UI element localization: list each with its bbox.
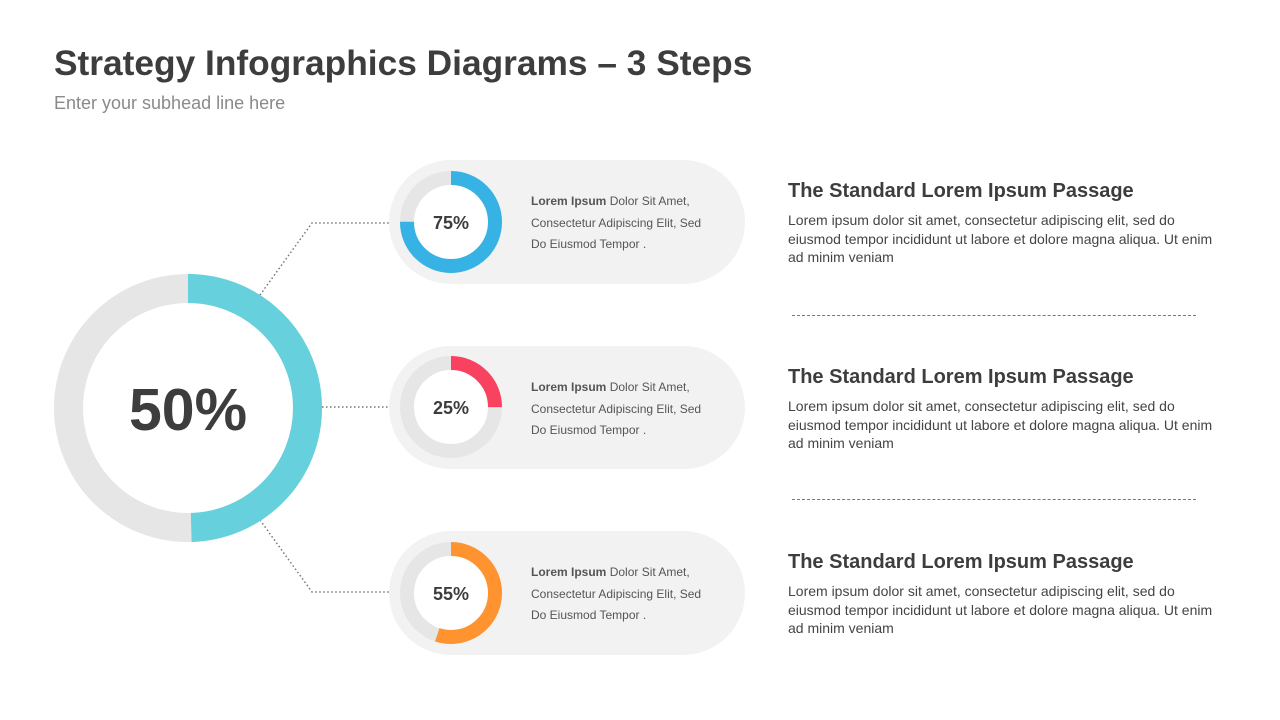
text block 2: Lorem ipsum dolor sit amet, consectetur adipiscing elit, sed do eiusmod tempor incididunt ut labore et dolore magna aliqua. Ut enim ad minim veniam [788,398,1212,451]
connectors [260,223,389,592]
text block 2 [788,366,1212,451]
pill text 1: Lorem Ipsum Dolor Sit Amet, Consectetur Adipiscing Elit, Sed Do Eiusmod Tempor . [531,194,701,251]
text block 3 [788,551,1212,636]
pill 1: 75% [433,213,469,233]
text block 1: The Standard Lorem Ipsum Passage [788,180,1134,202]
pill 2: 25% [433,398,469,418]
text block 3: Lorem ipsum dolor sit amet, consectetur adipiscing elit, sed do eiusmod tempor incididunt ut labore et dolore magna aliqua. Ut enim ad minim veniam [788,583,1212,636]
big donut 50% [68,288,308,528]
pill text 3: Lorem Ipsum Dolor Sit Amet, Consectetur Adipiscing Elit, Sed Do Eiusmod Tempor . [531,565,701,622]
pill text 2: Lorem Ipsum Dolor Sit Amet, Consectetur Adipiscing Elit, Sed Do Eiusmod Tempor . [531,380,701,437]
big donut 50%: 50% [129,377,247,443]
pill 1 [389,160,745,284]
text block 1: Lorem ipsum dolor sit amet, consectetur adipiscing elit, sed do eiusmod tempor incididunt ut labore et dolore magna aliqua. Ut enim ad minim veniam [788,212,1212,265]
pill 2 [389,346,745,469]
pill 3 [389,531,745,655]
pill 3: 55% [433,584,469,604]
subtitle: Enter your subhead line here [54,93,285,113]
title: Strategy Infographics Diagrams – 3 Steps [54,44,752,83]
text block 2: The Standard Lorem Ipsum Passage [788,366,1134,388]
text block 3: The Standard Lorem Ipsum Passage [788,551,1134,573]
text block 1 [788,180,1212,265]
